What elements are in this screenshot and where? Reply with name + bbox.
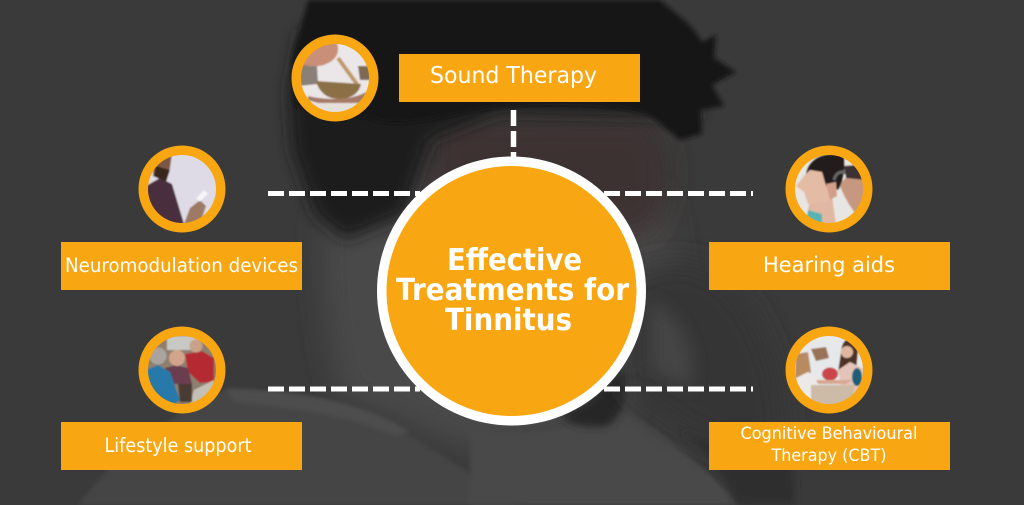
title: Tinnitus	[445, 303, 572, 338]
label box	[61, 422, 302, 470]
label box	[399, 54, 640, 102]
icon: woman fitted with hearing aid photo	[786, 146, 872, 232]
title: Effective	[447, 243, 582, 278]
icon: therapist with child photo	[786, 326, 872, 414]
neck	[322, 150, 680, 450]
label: Sound Therapy	[430, 63, 597, 89]
label box	[709, 422, 950, 470]
title: Treatments for	[396, 273, 629, 308]
label: Neuromodulation devices	[65, 254, 298, 277]
label: Cognitive Behavioural	[740, 424, 918, 443]
icon: man with device photo	[138, 146, 226, 232]
icon: seniors playing cards photo	[138, 326, 226, 414]
hand	[625, 262, 785, 455]
shirt, right side	[470, 410, 738, 505]
central circle with title	[377, 156, 646, 426]
shirt, left shoulder	[78, 390, 520, 505]
label: Therapy (CBT)	[771, 446, 886, 465]
icon: singing bowl photo	[292, 34, 378, 122]
label box	[709, 242, 950, 290]
connector: upper dashed line	[268, 191, 753, 196]
item: Hearing aids	[709, 146, 950, 290]
shirt collar	[225, 389, 410, 436]
head skin	[430, 120, 668, 235]
label: Lifestyle support	[104, 434, 252, 457]
label: Hearing aids	[763, 253, 895, 277]
hair back and side	[288, 30, 700, 240]
item: Neuromodulation devices	[61, 146, 302, 290]
label box	[61, 242, 302, 290]
hair top and tufts	[292, 0, 736, 140]
hand shadow lower right	[680, 430, 795, 505]
connector: lower dashed line	[268, 386, 753, 392]
connector: sound therapy dashed line	[511, 110, 516, 158]
item: Cognitive Behavioural Therapy	[709, 326, 950, 470]
item: Sound Therapy	[292, 34, 640, 122]
beard shadow	[560, 365, 627, 427]
item: Lifestyle support	[61, 326, 302, 470]
